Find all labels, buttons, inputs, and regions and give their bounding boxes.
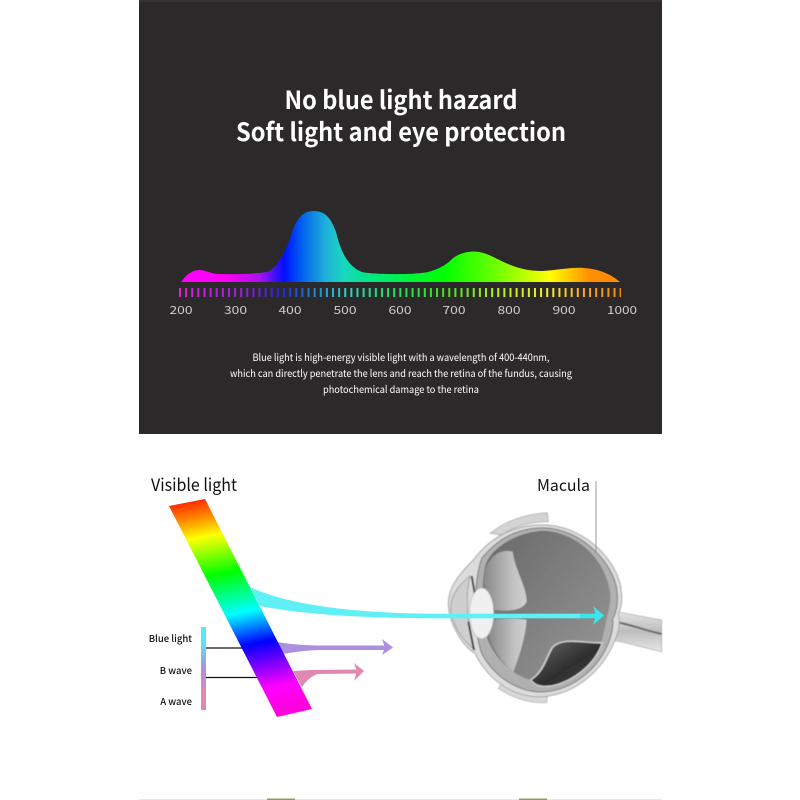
upper ciliary fan (484, 551, 527, 611)
axis labels: 1000 (607, 302, 637, 318)
legend bar (201, 627, 206, 710)
lower ciliary fan (489, 619, 527, 672)
pink a wave arrow (293, 663, 364, 687)
description text: photochemical damage to the retina (323, 381, 479, 396)
legend pointer lines (206, 648, 258, 678)
axis labels: 300 (224, 302, 247, 318)
heading: visible light: Visible light (151, 471, 238, 496)
axis labels (170, 302, 637, 318)
legend labels: B wave (160, 663, 192, 677)
spectrum curve (181, 211, 620, 282)
sclera (448, 525, 622, 697)
muscle stubs (490, 513, 548, 535)
bottom edge strip (139, 798, 662, 800)
chart: light spectrum (170, 211, 637, 318)
arrowhead: purple (382, 639, 393, 655)
axis labels: 200 (170, 302, 192, 318)
iris and anterior chamber (451, 576, 475, 650)
arrowhead: cyan (593, 606, 604, 625)
title: Soft light and eye protection (236, 113, 566, 149)
description text (230, 349, 572, 396)
purple b wave arrow (277, 639, 393, 655)
legend labels: Blue light (149, 631, 192, 645)
axis labels: 800 (498, 302, 520, 318)
description text: which can directly penetrate the lens and reach the retina of the fundus, causing (230, 365, 572, 380)
lower retina pocket (531, 641, 602, 686)
axis labels: 400 (278, 302, 302, 318)
cyan blue-light beam into eye (250, 587, 604, 625)
axis labels: 900 (552, 302, 576, 318)
callout: macula (537, 472, 596, 553)
vitreous body (483, 531, 610, 680)
wavelength ticks (179, 288, 621, 297)
macula leader line (595, 481, 597, 553)
legend labels: A wave (160, 694, 192, 708)
illustration: eye cross-section (448, 513, 662, 703)
description text: Blue light is high-energy visible light with a wavelength of 400-440nm, (252, 349, 550, 364)
optic nerve (613, 612, 662, 652)
lens (470, 588, 494, 639)
legend labels (149, 631, 192, 708)
visible light spectrum band (169, 499, 312, 717)
axis labels: 600 (388, 302, 412, 318)
title (236, 81, 566, 149)
panel: dark blue light hazard (139, 0, 662, 434)
callout: macula: Macula (537, 472, 590, 496)
choroid ring (475, 528, 617, 692)
title: No blue light hazard (284, 81, 518, 117)
axis labels: 500 (334, 302, 356, 318)
arrowhead: pink (354, 663, 364, 681)
axis labels: 700 (442, 302, 466, 318)
